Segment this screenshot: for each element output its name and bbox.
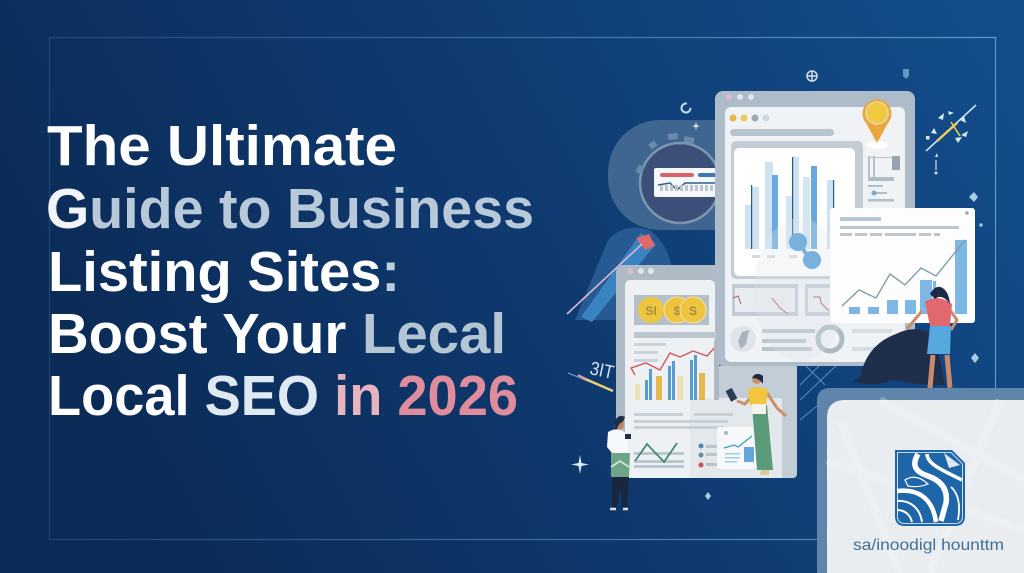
- icon: sparkle: [692, 122, 700, 130]
- coin banner: S: [689, 304, 697, 318]
- panel: large dashboard window: [715, 91, 915, 366]
- icon: pen with scribble: [568, 358, 616, 391]
- search bar: [730, 129, 834, 136]
- coin banner: SI: [645, 304, 657, 318]
- title: Listing Sites:: [48, 240, 400, 304]
- bars: [849, 240, 967, 314]
- figure: woman presenting: [907, 287, 957, 392]
- bar chart panel: [731, 141, 863, 279]
- coin banner: $: [674, 304, 681, 318]
- window dots: [726, 94, 754, 100]
- icon: location pin: [862, 99, 891, 149]
- panel: rising chart card: [830, 208, 975, 323]
- translucent overlay: [754, 218, 846, 362]
- logo wordmark: sa/inoodigl hounttm: [853, 537, 1004, 554]
- icon: cube: [807, 71, 817, 81]
- title: Guide to Business: [46, 177, 534, 241]
- pencil backing shape: [575, 228, 672, 320]
- icon: pen with scribble: 3IT: [588, 358, 616, 384]
- grid lines behind: [800, 360, 840, 420]
- logo mark: [895, 450, 965, 526]
- title: [46, 114, 534, 428]
- window body: [725, 107, 905, 362]
- small line chart: [634, 443, 684, 468]
- seal shape: [852, 329, 945, 385]
- coin banner: [634, 295, 709, 325]
- icon: small tag: [903, 69, 909, 79]
- finance combo chart: [631, 332, 719, 400]
- pencil icon: [567, 233, 656, 322]
- legend: [698, 444, 718, 468]
- icon: refresh ring: [682, 104, 690, 112]
- footer rows: [730, 326, 892, 352]
- title: The Ultimate: [47, 114, 397, 178]
- icon: diamonds: [705, 192, 983, 500]
- window dots: [627, 268, 654, 274]
- panel: small finance window: [616, 265, 797, 478]
- blob with gauge: [608, 120, 778, 230]
- mini report card: [717, 427, 761, 469]
- gauge card: [654, 168, 716, 197]
- icon: sparkle star: [571, 455, 589, 474]
- window body: [625, 280, 715, 478]
- figure: woman with phone: [607, 416, 631, 509]
- mini charts: [732, 284, 835, 316]
- icon: compass star: [911, 105, 976, 174]
- text rows: [634, 413, 733, 429]
- status dots: [730, 114, 770, 122]
- figure: woman with tablet: [726, 374, 786, 475]
- side list: [868, 156, 900, 202]
- title: Local SEO in 2026: [48, 364, 518, 428]
- title: Boost Your Lecal: [48, 302, 506, 366]
- panel: logo card: [817, 388, 1024, 573]
